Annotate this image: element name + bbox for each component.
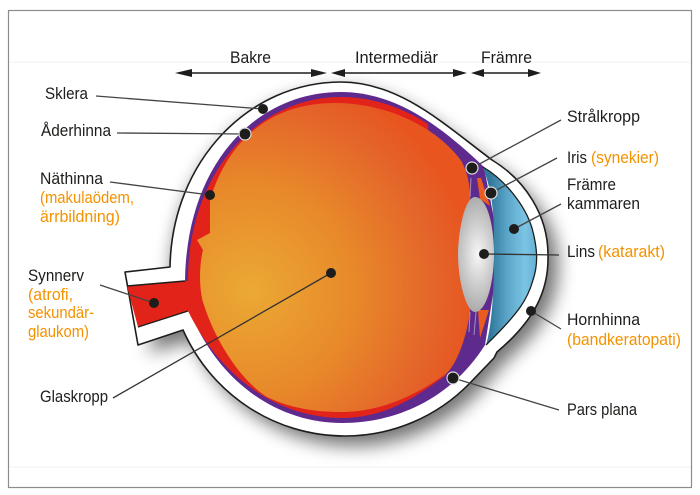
callout: Synnerv: (atrofi,	[28, 286, 73, 304]
callout: Lins	[479, 243, 665, 261]
iris lower	[478, 310, 489, 338]
optic nerve edge lines	[127, 281, 188, 327]
callout: Synnerv: glaukom)	[28, 323, 89, 341]
callout: Strålkropp	[466, 108, 640, 174]
heading: Främre: Främre	[481, 49, 532, 67]
callout: Näthinna: Näthinna	[40, 170, 104, 188]
zonule fibres	[469, 178, 476, 335]
callout: Hornhinna	[526, 306, 681, 349]
callout: Sklera	[45, 85, 268, 114]
choroid layer	[185, 92, 500, 423]
vitreous body	[197, 103, 476, 412]
callout: Iris: (synekier)	[591, 149, 659, 167]
callout: Främre kammaren: kammaren	[567, 195, 640, 213]
callout: Näthinna: ärrbildning)	[40, 208, 120, 226]
callout: Lins: Lins	[567, 243, 595, 261]
callout: Strålkropp: Strålkropp	[567, 108, 640, 126]
callout: Lins: (katarakt)	[598, 243, 665, 261]
heading: Bakre: Bakre	[230, 49, 271, 67]
callout: Näthinna: (makulaödem,	[40, 189, 134, 207]
callout: Hornhinna: (bandkeratopati)	[567, 331, 681, 349]
cornea inner line	[483, 167, 537, 345]
heading: Intermediär: Intermediär	[355, 49, 439, 67]
optic nerve and retina	[127, 97, 446, 418]
callout: Pars plana: Pars plana	[567, 401, 638, 419]
callout: Iris: Iris	[567, 149, 587, 167]
callout: Främre kammaren	[509, 176, 640, 234]
callout: Iris	[485, 149, 659, 199]
callout: Synnerv: Synnerv	[28, 267, 85, 285]
callout: Åderhinna	[41, 121, 251, 140]
callout: Glaskropp: Glaskropp	[40, 388, 108, 406]
callout: Synnerv: sekundär-	[28, 304, 94, 322]
callout: Främre kammaren: Främre	[567, 176, 616, 194]
callout: Åderhinna: Åderhinna	[41, 121, 112, 140]
sclera outer wall	[125, 82, 548, 436]
iris upper	[477, 178, 490, 206]
callout: Pars plana	[447, 372, 638, 419]
callout: Sklera: Sklera	[45, 85, 89, 103]
arrow: Bakre	[175, 69, 327, 77]
lens	[458, 197, 494, 312]
anterior chamber	[483, 167, 537, 345]
callout: Hornhinna: Hornhinna	[567, 311, 641, 329]
callout: Näthinna	[40, 170, 215, 226]
callout: Synnerv	[28, 267, 159, 341]
eye diagram	[125, 82, 558, 446]
callout: Glaskropp	[40, 268, 336, 406]
arrow: Främre	[471, 69, 541, 77]
eye drop shadow	[148, 90, 558, 446]
arrow: Intermediär	[331, 69, 467, 77]
